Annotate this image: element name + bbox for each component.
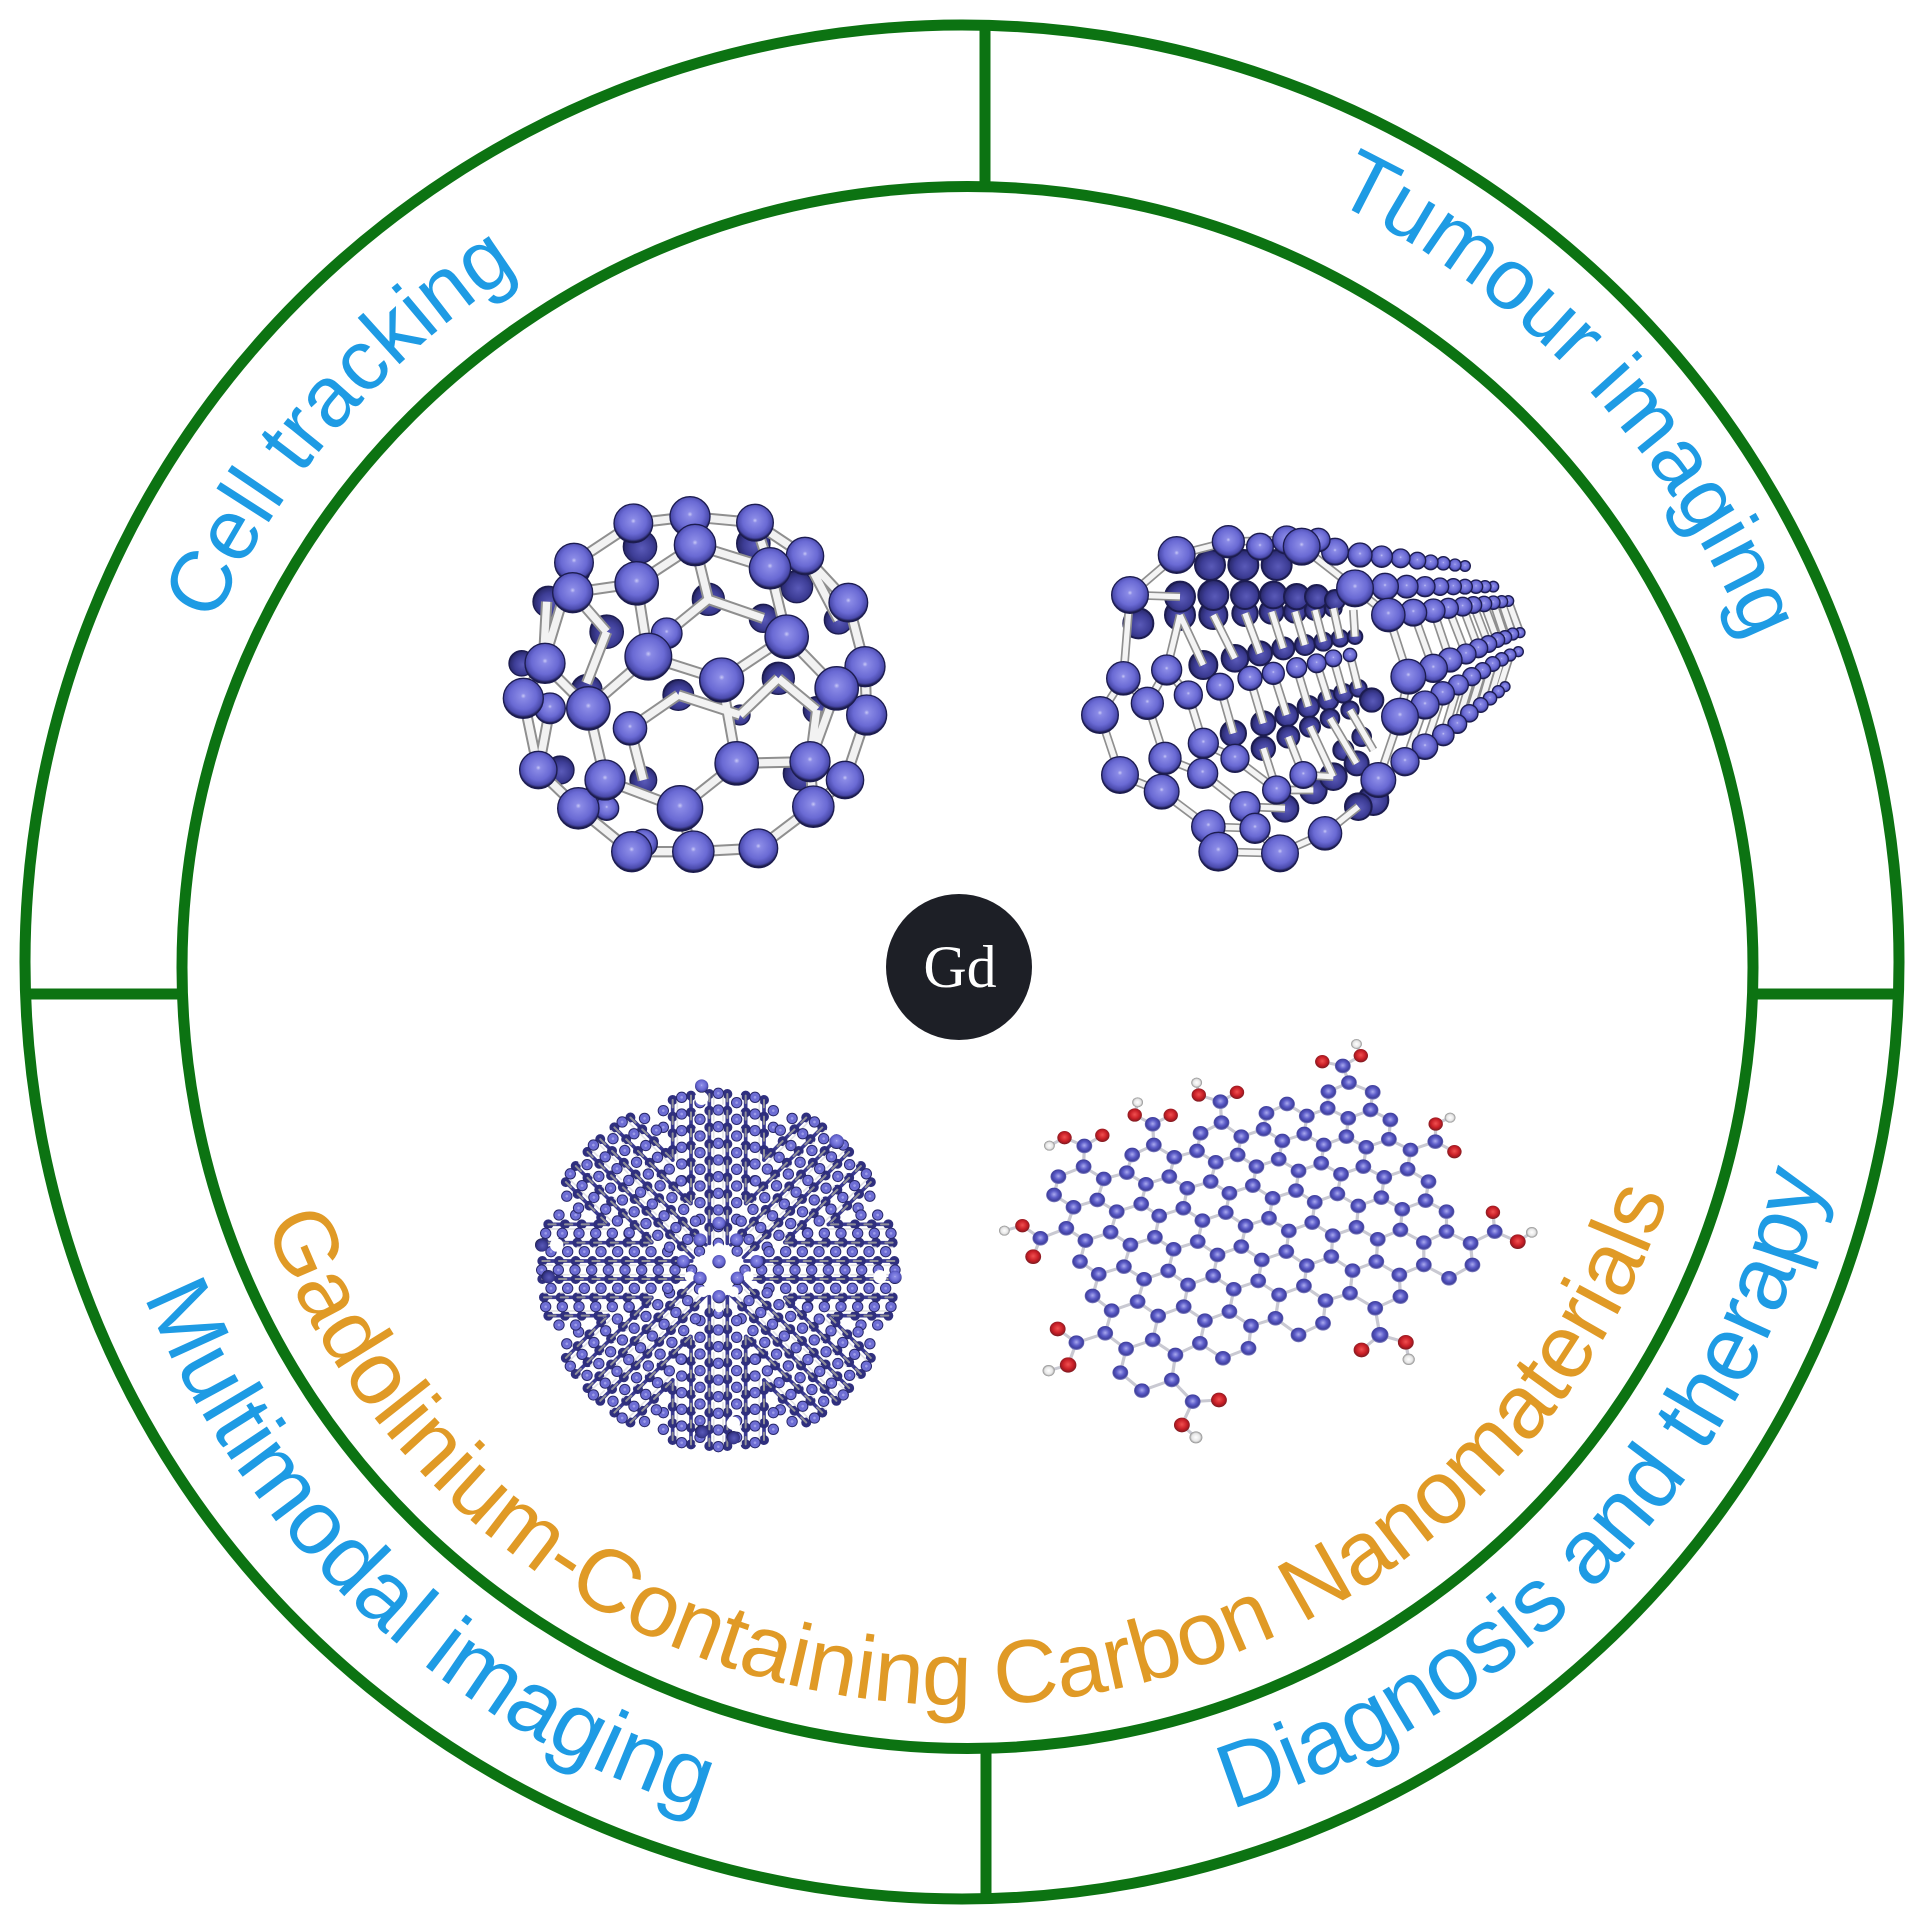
title: Gadolinium-Containing Carbon Nanomaterials: Gadolinium-Containing Carbon Nanomaterials <box>274 1188 1664 1724</box>
graphene oxide sheet <box>999 1039 1538 1443</box>
label: Diagnosis and therapy: Diagnosis and therapy <box>1216 1164 1834 1808</box>
label: Tumour imaging: Tumour imaging <box>1352 148 1789 639</box>
Gd core atom badge: Gd <box>923 934 997 1000</box>
carbon nanotube molecule <box>1082 526 1525 872</box>
label: Multimodal imaging: Multimodal imaging <box>146 1277 712 1822</box>
fullerene C60 molecule <box>503 497 887 872</box>
inner green ring <box>182 186 1753 1748</box>
Gd core atom badge <box>886 894 1032 1040</box>
label: Cell tracking: Cell tracking <box>170 236 518 611</box>
nanodiamond molecule <box>535 1079 902 1447</box>
